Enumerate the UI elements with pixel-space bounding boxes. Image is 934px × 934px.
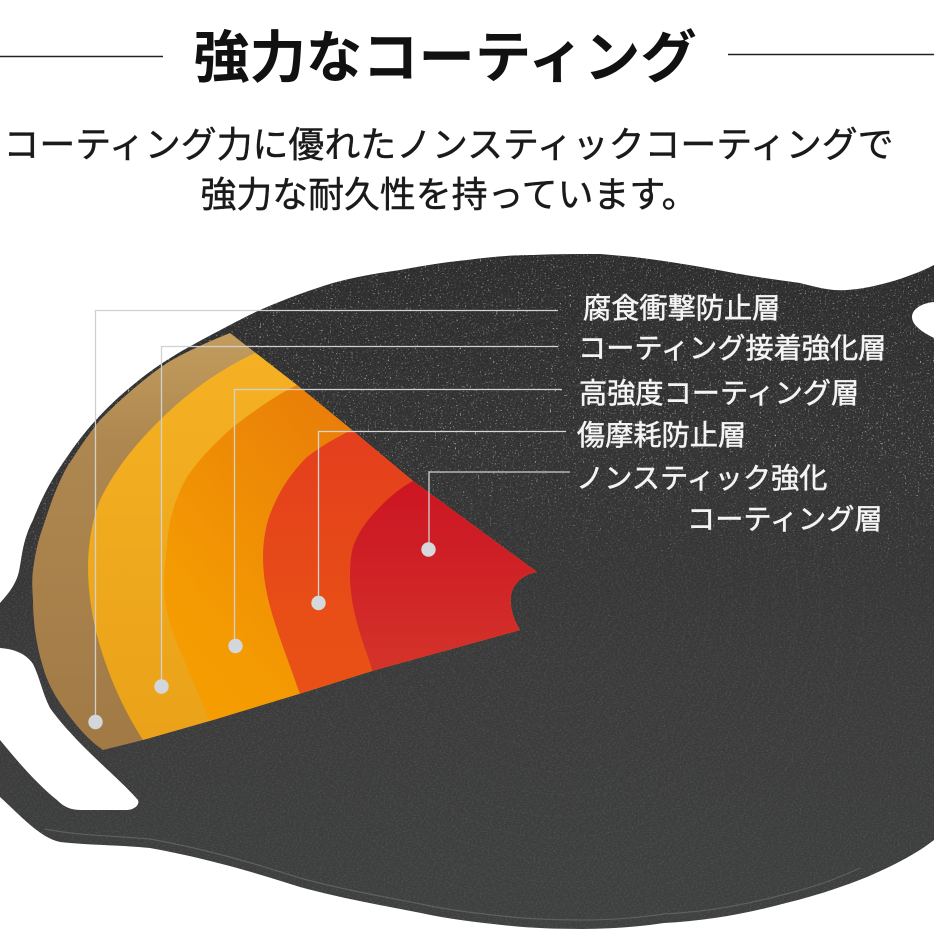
callout: non-stick reinforcement layer	[421, 462, 883, 557]
callout: high-strength coating layer: 高強度コーティング層	[579, 377, 859, 409]
layer: high-strength coating	[164, 385, 537, 721]
pan concentric texture	[325, 296, 864, 630]
description text: コーティング力に優れたノンスティックコーティングで	[3, 125, 894, 165]
callout: non-stick reinforcement layer: コーティング層	[687, 503, 883, 535]
callout: high-strength coating layer	[228, 377, 859, 653]
callout: wear protection layer: 傷摩耗防止層	[577, 419, 746, 451]
title: 強力なコーティング	[193, 26, 697, 89]
callout: corrosion and impact protection layer: 腐食衝撃防止層	[583, 292, 780, 324]
callout: corrosion and impact protection layer	[88, 292, 780, 729]
callout: coating adhesion layer: コーティング接着強化層	[578, 332, 886, 364]
layer: wear protection	[263, 430, 537, 694]
coating layers cutaway	[32, 333, 537, 750]
frying pan	[0, 240, 934, 934]
pan speckle texture	[0, 240, 934, 934]
layer: corrosion and impact protection	[32, 333, 300, 750]
callout: wear protection layer	[311, 419, 746, 610]
pan rim highlight	[45, 829, 860, 920]
description text	[3, 125, 894, 215]
callout: coating adhesion layer	[154, 332, 886, 694]
layer: adhesion reinforcement	[88, 352, 537, 740]
pan grain texture	[0, 240, 934, 934]
layer: non-stick reinforcement	[350, 481, 537, 671]
callout: non-stick reinforcement layer: ノンスティック強化	[576, 462, 827, 494]
description text: 強力な耐久性を持っています。	[200, 175, 698, 215]
